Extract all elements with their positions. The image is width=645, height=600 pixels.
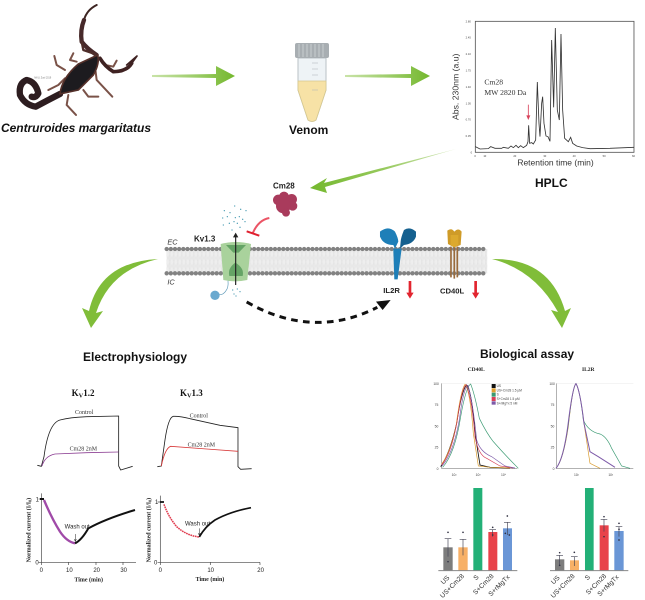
chart: IL2R histogram: IL2R [582, 367, 596, 373]
chart: HPLC chromatogram: 10 [483, 154, 487, 158]
chart: Kv1.3 recovery: 1 [155, 500, 159, 506]
trace: Kv1.3: Control [190, 414, 208, 420]
chart: Kv1.2 recovery: 1 [36, 498, 40, 504]
heading: biological assay: Biological assay [480, 347, 574, 361]
chart: HPLC chromatogram [450, 19, 635, 168]
trace: Kv1.2: Cm28 2nM [70, 446, 98, 452]
legend: S+Cm28 1.5 µM [497, 397, 520, 401]
icon: Cm28 peptide [273, 192, 297, 217]
panel: electrophysiology traces [37, 388, 252, 470]
arrow: IL2R decrease [406, 281, 414, 299]
chart: IL2R histogram: 0 [553, 467, 555, 471]
chart: HPLC chromatogram: 1.05 [466, 101, 471, 105]
curved arrow to biological assay [492, 259, 571, 328]
chart: HPLC chromatogram: Cm28 [484, 78, 503, 87]
arrow: dashed signalling [247, 300, 391, 322]
chart: IL2R histogram [549, 367, 633, 477]
chart: Kv1.3 recovery: 20 [257, 568, 265, 574]
trace: Kv1.2: Control [75, 410, 94, 416]
chart: CD40L histogram: 10² [452, 473, 457, 477]
label: IC: IC [167, 278, 175, 287]
curved arrow to electrophysiology [82, 259, 158, 328]
heading: electrophysiology: Electrophysiology [83, 350, 187, 364]
chart: Kv1.3 recovery: 0 [159, 568, 163, 574]
chart: HPLC chromatogram: 0 [474, 154, 476, 158]
chart: CD40L bars: S+rMgTx [487, 573, 512, 598]
scorpion illustration [20, 5, 137, 115]
diagram: cell membrane signalling [167, 181, 487, 322]
chart: CD40L histogram: 10⁴ [501, 473, 507, 477]
chart: Kv1.3 recovery: Normalized current (I/I [147, 502, 153, 562]
chart: HPLC chromatogram: 2.10 [466, 52, 471, 56]
chart: Kv1.2 recovery: ) [25, 498, 32, 500]
panel: bar charts [438, 488, 628, 600]
chart: Kv1.3 recovery: 10 [207, 568, 215, 574]
chart: HPLC chromatogram: 2.45 [466, 36, 471, 40]
chart: HPLC chromatogram: 1.75 [466, 69, 471, 73]
chart: Kv1.2 recovery [25, 493, 136, 584]
panel: current time courses [25, 493, 265, 584]
chart: IL2R histogram: 50 [551, 424, 555, 428]
chart: CD40L bars: S [472, 574, 481, 582]
receptor: CD40L [447, 229, 462, 279]
chart: CD40L histogram: 0 [437, 467, 439, 471]
chart: HPLC chromatogram: 50 [603, 154, 606, 158]
title: Kv1.3: V [187, 393, 192, 400]
chart: IL2R histogram: 10² [574, 473, 580, 477]
chart: HPLC chromatogram: 30 [543, 154, 547, 158]
chart: HPLC chromatogram: 2.80 [466, 19, 471, 23]
chart: CD40L histogram: 100 [433, 382, 439, 386]
channel: Kv1.3 [210, 233, 251, 300]
chart: Kv1.2 recovery: Time (min) [74, 577, 103, 584]
panel: flow cytometry histograms [433, 367, 633, 477]
chart: HPLC chromatogram: Retention time (min) [517, 158, 594, 168]
chart: IL2R bars [550, 488, 628, 600]
receptor: IL2R [380, 228, 416, 279]
species label: Centruroides margaritatus [1, 121, 151, 135]
chart: Kv1.3 recovery: 0 [148, 500, 153, 502]
chart: IL2R bars: S+rMgTx [596, 573, 621, 598]
chart: HPLC chromatogram: 0.35 [466, 134, 471, 138]
chart: HPLC chromatogram: 60 [632, 154, 635, 158]
chart: IL2R bars: US+Cm28 [550, 573, 577, 600]
chart: Kv1.3 recovery: Wash out [185, 522, 210, 528]
inhibition arrow [247, 218, 269, 236]
chart: Kv1.2 recovery: 0 [35, 560, 39, 566]
chart: Kv1.2 recovery: 0 [40, 568, 44, 574]
chart: IL2R histogram: 25 [551, 446, 555, 450]
chart: CD40L histogram: 50 [435, 424, 439, 428]
chart: Kv1.2 recovery: 30 [120, 568, 128, 574]
chart: CD40L histogram: 25 [435, 446, 439, 450]
chart: CD40L bars: US+Cm28 [439, 573, 466, 600]
title: Kv1.2: 1.2 [83, 388, 95, 398]
legend: US+Cm28 1.5 µM [497, 388, 522, 392]
chart: HPLC chromatogram: MW 2820 Da [484, 88, 527, 97]
arrow: CD40L decrease [472, 281, 479, 299]
legend: S [497, 393, 499, 397]
venom label: Venom [289, 123, 328, 137]
title: Kv1.3: K [180, 388, 187, 398]
chart: HPLC chromatogram: Abs. 230nm (a.u) [450, 53, 460, 120]
title: Kv1.2: K [72, 388, 79, 398]
legend: US [497, 384, 501, 388]
chart: Kv1.3 recovery: 0 [154, 560, 158, 566]
chart: IL2R bars: US [550, 574, 562, 586]
legend: S+rMgTx 5 nM [497, 401, 518, 405]
chart: Kv1.2 recovery: 0 [27, 500, 32, 502]
ions: potassium dots [223, 206, 246, 230]
chart: CD40L bars [438, 488, 517, 600]
chart: CD40L histogram: 10³ [476, 473, 481, 477]
scorpion illustration: MVU, Zool 2019 [34, 78, 52, 80]
legend [492, 384, 522, 405]
chart: Kv1.3 recovery: Time (min) [196, 576, 224, 583]
chart: HPLC chromatogram: 1.40 [466, 85, 471, 89]
trace: Kv1.3: Cm28 2nM [188, 443, 216, 449]
trace: Kv1.2 [37, 410, 133, 470]
chart: Kv1.2 recovery: 20 [93, 568, 101, 574]
label: EC: EC [167, 238, 178, 247]
chart: HPLC chromatogram: 40 [573, 154, 576, 158]
chart: Kv1.2 recovery: Wash out [65, 525, 90, 531]
label: CD40L: CD40L [440, 286, 465, 295]
membrane bilayer [167, 249, 487, 273]
chart: Kv1.2 recovery: Normalized current (I/I [26, 502, 32, 562]
chart: HPLC chromatogram: 20 [513, 154, 517, 158]
arrow: venom to HPLC [345, 66, 430, 86]
chart: HPLC chromatogram: 0 [471, 150, 473, 154]
chart: CD40L histogram [433, 367, 522, 477]
chart: HPLC chromatogram: 0.70 [466, 118, 471, 122]
chart: CD40L histogram: CD40L [468, 367, 485, 373]
arrow: scorpion to venom [152, 66, 235, 86]
chart: Kv1.3 recovery: ) [146, 498, 153, 500]
chart: IL2R histogram: 75 [551, 403, 555, 407]
title: Kv1.2: V [79, 393, 84, 400]
chart: Kv1.3 recovery [146, 496, 265, 583]
chart: IL2R bars: S+Cm28 [585, 573, 608, 596]
chart: CD40L bars: US [440, 574, 452, 586]
title: Kv1.3: 1.3 [192, 388, 203, 398]
chart: CD40L histogram: 75 [435, 403, 439, 407]
label: IL2R: IL2R [383, 286, 400, 295]
chart: IL2R bars: S [584, 574, 592, 582]
chart: IL2R histogram: 10³ [608, 473, 614, 477]
label: Cm28: Cm28 [273, 181, 295, 190]
arrow: HPLC to Cm28 [310, 149, 456, 193]
label: Kv1.3: Kv1.3 [194, 234, 216, 243]
chart: CD40L bars: S+Cm28 [472, 573, 496, 596]
trace: Kv1.3 [157, 414, 252, 469]
HPLC label: HPLC [535, 176, 568, 190]
chart: IL2R histogram: 100 [549, 382, 555, 386]
chart: Kv1.2 recovery: 10 [66, 568, 73, 574]
icon: venom tube [295, 43, 329, 122]
